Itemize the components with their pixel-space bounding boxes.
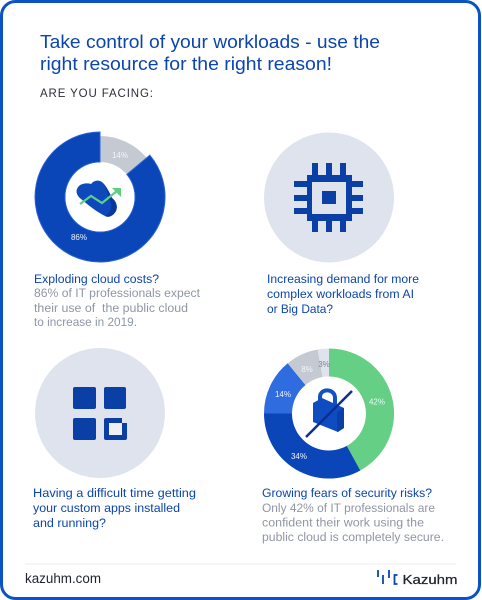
icon: app grid [35, 348, 165, 478]
title: right resource for the right reason! [40, 53, 332, 74]
text: custom apps: your custom apps installed [33, 501, 180, 515]
text: security risks: confident their work using the [262, 516, 424, 530]
donut chart: cloud use: 86% [71, 233, 87, 242]
logo: Kazuhm [378, 570, 458, 587]
panel: security risks [262, 348, 444, 544]
text: complex workloads: Increasing demand for more [267, 272, 419, 286]
text: security risks: public cloud is completely secure. [262, 530, 444, 544]
donut chart: security confidence: 8% [301, 365, 313, 374]
icon: cloud with arrow [77, 181, 121, 217]
title: Take control of your workloads - use the [40, 31, 380, 52]
donut chart: security confidence: 42% [369, 398, 385, 406]
text: exploding cloud costs [34, 272, 201, 329]
text: exploding cloud costs: 86% of IT professionals expect [34, 286, 201, 300]
donut chart: security confidence [264, 348, 394, 479]
text: exploding cloud costs: Exploding cloud costs? [34, 272, 159, 286]
text: exploding cloud costs: to increase in 2019. [34, 315, 137, 329]
text: custom apps: Having a difficult time getting [33, 486, 196, 500]
panel: exploding cloud costs [34, 132, 201, 329]
text: security risks: Only 42% of IT professionals are [262, 501, 435, 515]
icon: crossed-out padlock [306, 390, 352, 437]
panel: custom apps [33, 348, 196, 530]
title [40, 31, 380, 74]
text: security risks: Growing fears of security risks? [262, 486, 432, 500]
text: custom apps: and running? [33, 516, 106, 530]
donut chart: security confidence: 34% [291, 452, 307, 461]
donut chart: security confidence: 14% [275, 390, 291, 399]
text: security risks [262, 486, 444, 544]
donut chart: cloud use: 14% [112, 151, 128, 160]
text: complex workloads: or Big Data? [267, 302, 333, 316]
donut chart: cloud use [35, 132, 165, 262]
text: custom apps [33, 486, 196, 530]
footer url: kazuhm.com [25, 571, 101, 586]
panel: complex workloads [264, 132, 419, 316]
donut chart: security confidence: 3% [318, 360, 330, 369]
text: complex workloads: complex workloads from AI [267, 287, 414, 301]
text: complex workloads [267, 272, 419, 316]
logo: Kazuhm: Kazuhm [402, 572, 458, 587]
subheading: ARE YOU FACING: [40, 88, 153, 100]
icon: processor chip [264, 132, 394, 262]
text: exploding cloud costs: their use of the public cloud [34, 301, 188, 315]
